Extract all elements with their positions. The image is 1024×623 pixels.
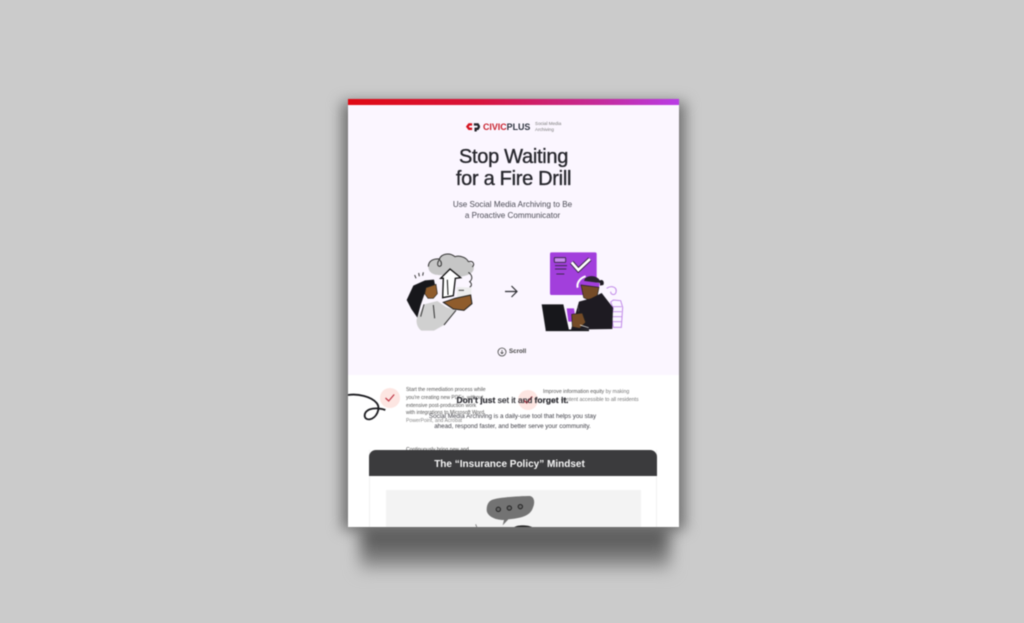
underlying text: left column: Start the remediation process while	[406, 387, 486, 393]
body paragraph: ahead, respond faster, and better serve your community.	[434, 423, 591, 430]
underlying text: left column: you're creating new PDFs, without	[406, 395, 483, 401]
underlying text: right column: content accessible to all residents	[561, 397, 639, 403]
subtitle: a Proactive Communicator	[465, 211, 560, 220]
illustration frame	[386, 490, 641, 527]
icon: scroll circle	[496, 347, 508, 358]
scroll label: Scroll	[509, 348, 526, 355]
logo descriptor: Social Media	[535, 121, 561, 126]
logo wordmark: CIVICPLUS	[483, 122, 530, 132]
body paragraph	[428, 412, 597, 430]
logo	[465, 121, 562, 132]
decorative squiggle	[347, 392, 386, 422]
logo descriptor	[534, 121, 562, 132]
illustration: speech bubble	[474, 495, 535, 528]
icon: right check badge	[518, 390, 538, 410]
underlying text: left column: with integrations to Microsoft Word,	[406, 410, 485, 416]
hero panel	[348, 105, 679, 375]
scroll prompt	[496, 347, 527, 358]
page side shadow	[342, 102, 685, 530]
underlying text: right column	[542, 388, 639, 403]
underlying text: partly hidden line: Continuously bring new and	[406, 447, 469, 453]
document page	[348, 99, 679, 527]
body paragraph: Social Media Archiving is a daily-use tool that helps you stay	[429, 413, 596, 420]
arrow	[504, 285, 518, 298]
panel header	[369, 450, 657, 476]
illustration: person at laptop with checklist	[541, 252, 624, 332]
panel: insurance policy mindset	[369, 450, 657, 527]
heading: don't just set it and forget it: Don't just set it and forget it.	[456, 395, 569, 405]
underlying text: left column	[406, 386, 486, 424]
subtitle	[452, 200, 572, 220]
icon: CivicPlus mark	[465, 122, 481, 132]
underlying text: left column: extensive post-production work	[406, 402, 476, 408]
logo descriptor: Archiving	[535, 127, 554, 132]
illustration: stressed person with cloud	[406, 252, 475, 331]
top gradient bar	[348, 99, 679, 105]
title: for a Fire Drill	[456, 168, 571, 190]
subtitle: Use Social Media Archiving to Be	[453, 200, 572, 209]
title: Stop Waiting	[459, 146, 568, 168]
title	[455, 146, 572, 190]
icon: left check badge	[380, 388, 400, 408]
ground shadow	[360, 520, 670, 570]
underlying text: left column: PowerPoint, and Acrobat	[406, 418, 462, 424]
panel header: The “Insurance Policy” Mindset	[434, 459, 585, 470]
underlying text: right column: Improve information equity by making	[543, 389, 629, 395]
